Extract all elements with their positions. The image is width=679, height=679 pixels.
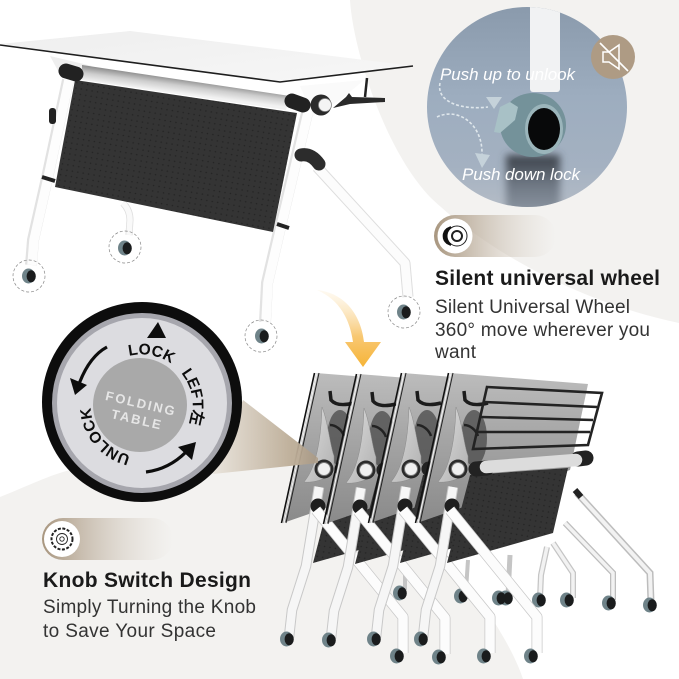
dial ring labels: UNLOCK: [80, 408, 129, 466]
leg knuckle: [301, 155, 319, 164]
right front leg and caster: [245, 113, 308, 352]
text: silent wheel description: Silent Universal Wheel: [435, 297, 630, 318]
text: silent wheel description: want: [434, 342, 477, 363]
dial ring labels: LOCK: [128, 344, 176, 364]
folded table rack: [473, 387, 602, 449]
text: silent wheel description: [434, 297, 650, 363]
folded table 4: [414, 373, 588, 664]
folded table 3: [367, 373, 541, 664]
left front leg and caster: [13, 80, 69, 292]
right rear leg and caster: [317, 167, 420, 328]
callout: cone from knob detail to table: [213, 400, 318, 474]
unfolded table: [0, 31, 420, 352]
table top: [0, 31, 413, 82]
crossbar tube: [66, 65, 303, 110]
text: knob description: to Save Your Space: [43, 621, 216, 642]
heading: knob switch design: Knob Switch Design: [43, 569, 251, 592]
modesty panel: [55, 80, 297, 232]
folded tables stack: [280, 373, 657, 664]
dial arrows: [70, 322, 196, 472]
leg band: [277, 224, 289, 228]
label: push up: Push up to unlook: [440, 65, 576, 84]
icon pill: knob gear: [42, 518, 173, 560]
background panel: lower left: [0, 463, 523, 679]
folded table 2: [322, 374, 496, 664]
label: push down: Push down lock: [462, 165, 582, 184]
dial ring labels: [80, 344, 205, 466]
icon pill: wheel brake: [434, 215, 556, 257]
wheel photo details: [494, 0, 566, 215]
dial centre text: TABLE: [110, 406, 164, 433]
panel: wheel photo: [427, 0, 627, 215]
text: silent wheel description: 360° move wherever you: [435, 320, 650, 341]
dial ring labels: LEFT左: [182, 368, 205, 426]
dial centre text: FOLDING: [104, 388, 178, 419]
dashed arrow up: [440, 83, 502, 109]
folded table 1: [280, 373, 454, 664]
knob on table: [310, 94, 332, 116]
background panel: upper right: [350, 0, 679, 323]
dial centre text: [104, 388, 178, 433]
knob detail dial: [42, 302, 242, 502]
wheel photo background: [427, 7, 627, 207]
arrow: folding direction: [317, 290, 381, 367]
dial centre: [93, 358, 187, 452]
under-desk bracket and hook: [50, 56, 385, 116]
rear legs and casters of stack: [393, 490, 657, 612]
text: knob description: Simply Turning the Knob: [43, 597, 256, 618]
text: knob description: [43, 597, 256, 642]
icon: mute badge: [591, 35, 635, 79]
rear leg and caster: [109, 203, 141, 263]
dashed arrow down: [437, 114, 490, 168]
heading: silent universal wheel: Silent universal wheel: [435, 267, 660, 290]
